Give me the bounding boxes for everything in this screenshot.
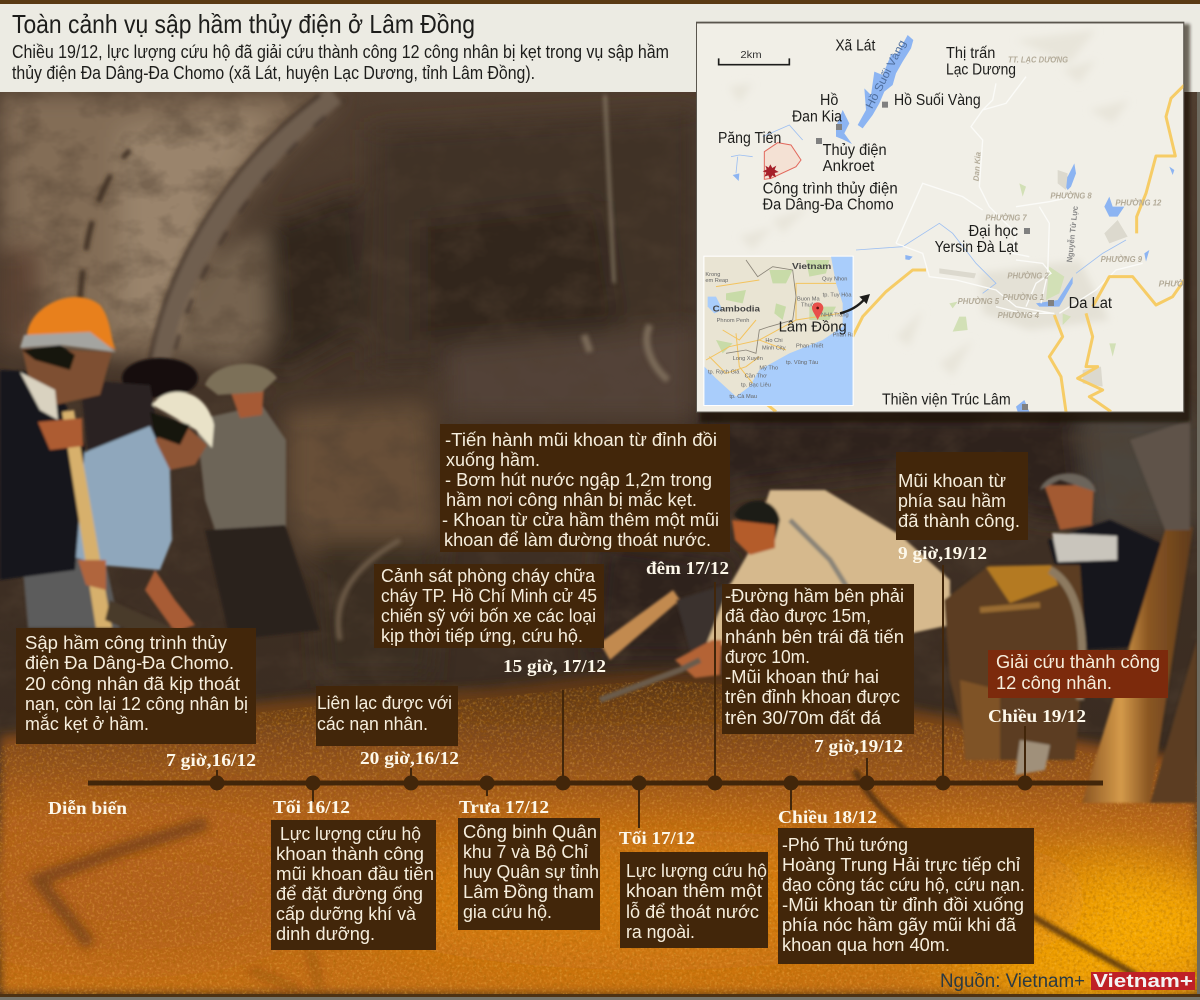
- inset map of southern Vietnam: Quy Nhon: [822, 277, 847, 283]
- grey map labels: TT. LẠC DƯƠNG: [1008, 56, 1068, 65]
- grey map labels: Hồ Suối Vàng: [864, 38, 909, 111]
- callout: deputy prime minister: -Phó Thủ tướng: [782, 835, 908, 855]
- arrow from inset to map: [840, 294, 870, 313]
- inset map of southern Vietnam: tp. Tuy Hòa: [823, 293, 852, 299]
- callout: first drill hole: dinh dưỡng.: [276, 924, 375, 944]
- callout: deputy prime minister: khoan qua hơn 40m.: [782, 935, 950, 955]
- inset map of southern Vietnam: Vietnam: [792, 262, 831, 271]
- timeline date labels: 9 giờ,19/12: [898, 543, 987, 563]
- callout: deputy prime minister: Hoàng Trung Hải trực tiếp chỉ: [782, 855, 1020, 875]
- callout: tunnel collapse 16/12: điện Đa Dâng-Đa Chomo.: [25, 653, 234, 673]
- inset map of southern Vietnam: Phan Thiết: [796, 343, 824, 349]
- callout: army engineers: huy Quân sự tỉnh: [463, 862, 599, 882]
- map place labels: Hồ Suối Vàng: [894, 92, 981, 109]
- inset map of southern Vietnam: tp. Rạch Giá: [708, 369, 740, 375]
- callout: tunnel progress 7h 19/12: -Mũi khoan thứ hai: [725, 667, 879, 687]
- map place labels: Hồ: [820, 92, 838, 109]
- scale bar: 2km: [740, 50, 762, 61]
- source credit: Nguồn: Vietnam+: [940, 971, 1085, 992]
- map place labels: Ankroet: [823, 158, 875, 175]
- callout: tunnel collapse 16/12: Sập hầm công trình thủy: [25, 633, 227, 653]
- callout: army engineers: [458, 818, 600, 930]
- scale bar: [719, 50, 789, 65]
- callout: tunnel collapse 16/12: 20 công nhân đã kịp thoát: [25, 674, 240, 694]
- grey map labels: PHƯỜNG 5: [958, 297, 1000, 306]
- callout: rescue success: Giải cứu thành công: [996, 652, 1160, 672]
- callout: tunnel progress 7h 19/12: [722, 584, 914, 734]
- callout: drainage hole: khoan thêm một: [626, 881, 762, 901]
- callout: fire police: chiến sỹ với bốn xe các loại: [381, 606, 596, 626]
- callout: tunnel collapse 16/12: mắc kẹt ở hầm.: [25, 713, 149, 734]
- grey map labels: PHƯỜNG 7: [985, 214, 1027, 223]
- title: Toàn cảnh vụ sập hầm thủy điện ở Lâm Đồng: [12, 9, 475, 39]
- subtitle: [12, 42, 669, 83]
- callout: first drill hole: cấp dưỡng khí và: [276, 904, 417, 924]
- timeline date labels: đêm 17/12: [646, 558, 729, 578]
- callout: night of 17/12: [440, 424, 730, 552]
- inset map of southern Vietnam: Ho Chi: [765, 338, 783, 344]
- grey map labels: PHƯỜNG 1: [1003, 293, 1045, 302]
- timeline date labels: Diễn biến: [48, 798, 127, 818]
- callout: deputy prime minister: đạo công tác cứu hộ, cứu nạn.: [782, 875, 1025, 895]
- timeline date labels: 20 giờ,16/12: [360, 748, 459, 768]
- blue shirt worker: [22, 555, 120, 628]
- callout: army engineers: Công binh Quân: [463, 822, 597, 842]
- inset map of southern Vietnam: Long Xuyên: [733, 356, 763, 362]
- tunnel wall and rock: [0, 92, 1197, 680]
- inset map of southern Vietnam: Cambodia: [713, 304, 761, 313]
- inset map of southern Vietnam: tp. Vũng Tàu: [786, 360, 818, 366]
- timeline date labels: 7 giờ,16/12: [166, 750, 256, 770]
- inset map of southern Vietnam: Krong: [705, 272, 720, 278]
- source credit: [940, 971, 1195, 992]
- inset map of southern Vietnam: Buon Ma: [797, 297, 820, 303]
- green parks: [949, 183, 1116, 357]
- callout: army engineers: gia cứu hộ.: [463, 902, 552, 922]
- orange rubble floor: [0, 671, 1197, 994]
- callout: drainage hole: Lực lượng cứu hộ: [626, 861, 767, 881]
- header panel: [0, 0, 1200, 92]
- inset map of southern Vietnam: Cần Thơ: [745, 373, 767, 379]
- inset map of southern Vietnam: [703, 256, 856, 406]
- callout: army engineers: khu 7 và Bộ Chỉ: [463, 842, 588, 862]
- callout: drainage hole: ra ngoài.: [626, 922, 695, 942]
- timeline date labels: Tối 16/12: [273, 797, 350, 817]
- timeline date labels: Chiều 19/12: [988, 706, 1086, 726]
- workers and machinery at right: [600, 420, 1197, 803]
- inset map of southern Vietnam: tp. Cà Mau: [729, 394, 757, 400]
- callout: rescue success: 12 công nhân.: [996, 673, 1112, 693]
- map place labels: Công trình thủy điện: [763, 180, 898, 197]
- callout: first drill hole: Lực lượng cứu hộ: [280, 824, 421, 844]
- callout: tunnel progress 7h 19/12: đã đào được 15m,: [725, 606, 871, 626]
- timeline date labels: 15 giờ, 17/12: [503, 656, 606, 676]
- grey map labels: [864, 38, 1185, 320]
- map place labels: [718, 38, 1113, 409]
- map place labels: Đại học: [969, 223, 1018, 240]
- project area outline with explosion marker: [763, 143, 801, 179]
- callout: night of 17/12: khoan để làm đường thoát nước.: [444, 530, 711, 550]
- map place labels: Thủy điện: [823, 142, 887, 159]
- grey map labels: PHƯỜNG 4: [998, 311, 1040, 320]
- timeline date labels: [48, 543, 1086, 848]
- inset map of southern Vietnam: Minh City: [762, 345, 786, 351]
- callout: fire police: cháy TP. Hồ Chí Minh cử 45: [381, 586, 597, 606]
- callout: night of 17/12: hầm nơi công nhân bị mắc kẹt.: [446, 489, 697, 510]
- map panel: [696, 22, 1190, 422]
- grey-hat worker: [196, 406, 287, 531]
- map place labels: Thiền viện Trúc Lâm: [882, 392, 1011, 409]
- map place labels: Lạc Dương: [946, 62, 1016, 79]
- callout: first drill hole: mũi khoan đầu tiên: [276, 864, 434, 884]
- callout: fire police: [374, 564, 604, 648]
- inset map of southern Vietnam: Thuột: [801, 303, 816, 309]
- grey map labels: Dan Kia: [972, 151, 983, 181]
- callout: tunnel progress 7h 19/12: -Đường hầm bên phải: [725, 586, 904, 606]
- event dots: [210, 776, 1032, 790]
- callout: tunnel progress 7h 19/12: được 10m.: [725, 647, 810, 667]
- arch ribs: [80, 95, 668, 640]
- timeline date labels: 7 giờ,19/12: [814, 736, 903, 756]
- inset map of southern Vietnam: NHA Trang: [821, 313, 849, 319]
- callout: drainage hole: lỗ để thoát nước: [626, 901, 759, 922]
- callout: night of 17/12: -Tiến hành mũi khoan từ đỉnh đồi: [445, 430, 717, 450]
- callout: night of 17/12: xuống hầm.: [446, 450, 540, 470]
- grey map labels: PHƯỜNG 12: [1115, 198, 1162, 207]
- grey map labels: Nguyễn Tử Lực: [1065, 205, 1080, 263]
- grey map labels: PHƯỜ: [1159, 280, 1185, 289]
- orange-helmet worker: [0, 370, 85, 580]
- timeline date labels: Trưa 17/12: [459, 797, 549, 817]
- timeline date labels: Chiều 18/12: [778, 807, 877, 827]
- callout: contact made: [316, 686, 458, 746]
- inset map of southern Vietnam: Phnom Penh: [717, 318, 749, 324]
- map place labels: Da Lat: [1069, 295, 1113, 312]
- grey map labels: PHƯỜNG 9: [1101, 255, 1143, 264]
- workers at left: [0, 297, 320, 655]
- timeline: [88, 565, 1103, 828]
- callout: deputy prime minister: -Mũi khoan từ đỉnh đồi xuống: [782, 895, 1024, 915]
- callout: fire police: Cảnh sát phòng cháy chữa: [381, 566, 596, 586]
- callout: contact made: các nạn nhân.: [317, 714, 428, 734]
- map markers: [816, 102, 1054, 410]
- red location pin: [812, 302, 823, 320]
- callout: tunnel collapse 16/12: nạn, còn lại 12 công nhân bị: [25, 694, 248, 714]
- dark hair/background blob: [122, 358, 198, 398]
- inset map of southern Vietnam: Phan Ra: [833, 333, 856, 339]
- callout: drill success 9h 19/12: [896, 452, 1028, 540]
- callout: night of 17/12: - Khoan từ cửa hầm thêm một mũi: [442, 510, 719, 530]
- callout: first drill hole: khoan thành công: [276, 844, 424, 864]
- callout: first drill hole: để đặt đường ống: [276, 884, 423, 904]
- inset map of southern Vietnam: tp. Bạc Liêu: [741, 383, 771, 389]
- logo: Vietnam+: Vietnam+: [1093, 971, 1193, 991]
- grey map labels: PHƯỜNG 2: [1007, 272, 1049, 281]
- subtitle: thủy điện Đa Dâng-Đa Chomo (xã Lát, huyện Lạc Dương, tỉnh Lâm Đồng).: [12, 63, 535, 83]
- callout: deputy prime minister: phía nóc hầm gãy mũi khi đã: [782, 915, 1017, 935]
- map place labels: Đan Kia: [792, 108, 842, 125]
- callout: night of 17/12: - Bơm hút nước ngập 1,2m trong: [445, 470, 712, 490]
- map place labels: Thị trấn: [946, 45, 995, 62]
- callout: fire police: kịp thời tiếp ứng, cứu hộ.: [381, 626, 583, 646]
- yellow highways: [768, 85, 1184, 412]
- callout: drill success 9h 19/12: phía sau hầm: [898, 491, 1006, 511]
- inset map of southern Vietnam: em Reap: [705, 278, 728, 284]
- callout: tunnel progress 7h 19/12: nhánh bên trái đã tiến: [725, 627, 904, 647]
- callout: drainage hole: [620, 852, 768, 948]
- callout: drill success 9h 19/12: đã thành công.: [898, 511, 1020, 531]
- grey map labels: PHƯỜNG 8: [1050, 192, 1092, 201]
- inset map of southern Vietnam: Lâm Đồng: [779, 319, 847, 335]
- white local roads: [896, 77, 1143, 313]
- callout: army engineers: Lâm Đồng tham: [463, 882, 594, 902]
- callout: tunnel progress 7h 19/12: trên đỉnh khoan được: [725, 687, 900, 707]
- callout: first drill hole: [271, 820, 436, 950]
- map place labels: Yersin Đà Lạt: [935, 239, 1019, 256]
- callout: tunnel collapse 16/12: [16, 628, 256, 744]
- inset map of southern Vietnam: Mỹ Tho: [759, 365, 778, 371]
- lakes and rivers: [733, 35, 1174, 412]
- map place labels: Păng Tiên: [718, 130, 781, 147]
- callout: contact made: Liên lạc được với: [317, 693, 452, 713]
- callout: rescue success: [988, 650, 1168, 698]
- map place labels: Đa Dâng-Đa Chomo: [763, 196, 894, 213]
- callout: deputy prime minister: [778, 828, 1034, 964]
- callout: drill success 9h 19/12: Mũi khoan từ: [898, 471, 1006, 491]
- subtitle: Chiều 19/12, lực lượng cứu hộ đã giải cứu thành công 12 công nhân bị kẹt trong vụ sập hầm: [12, 42, 669, 62]
- terrain shading: [729, 30, 1129, 377]
- stems: [217, 565, 1025, 828]
- timeline date labels: Tối 17/12: [619, 828, 695, 848]
- map place labels: Xã Lát: [835, 38, 876, 55]
- callout: tunnel progress 7h 19/12: trên 30/70m đất đá: [725, 708, 882, 728]
